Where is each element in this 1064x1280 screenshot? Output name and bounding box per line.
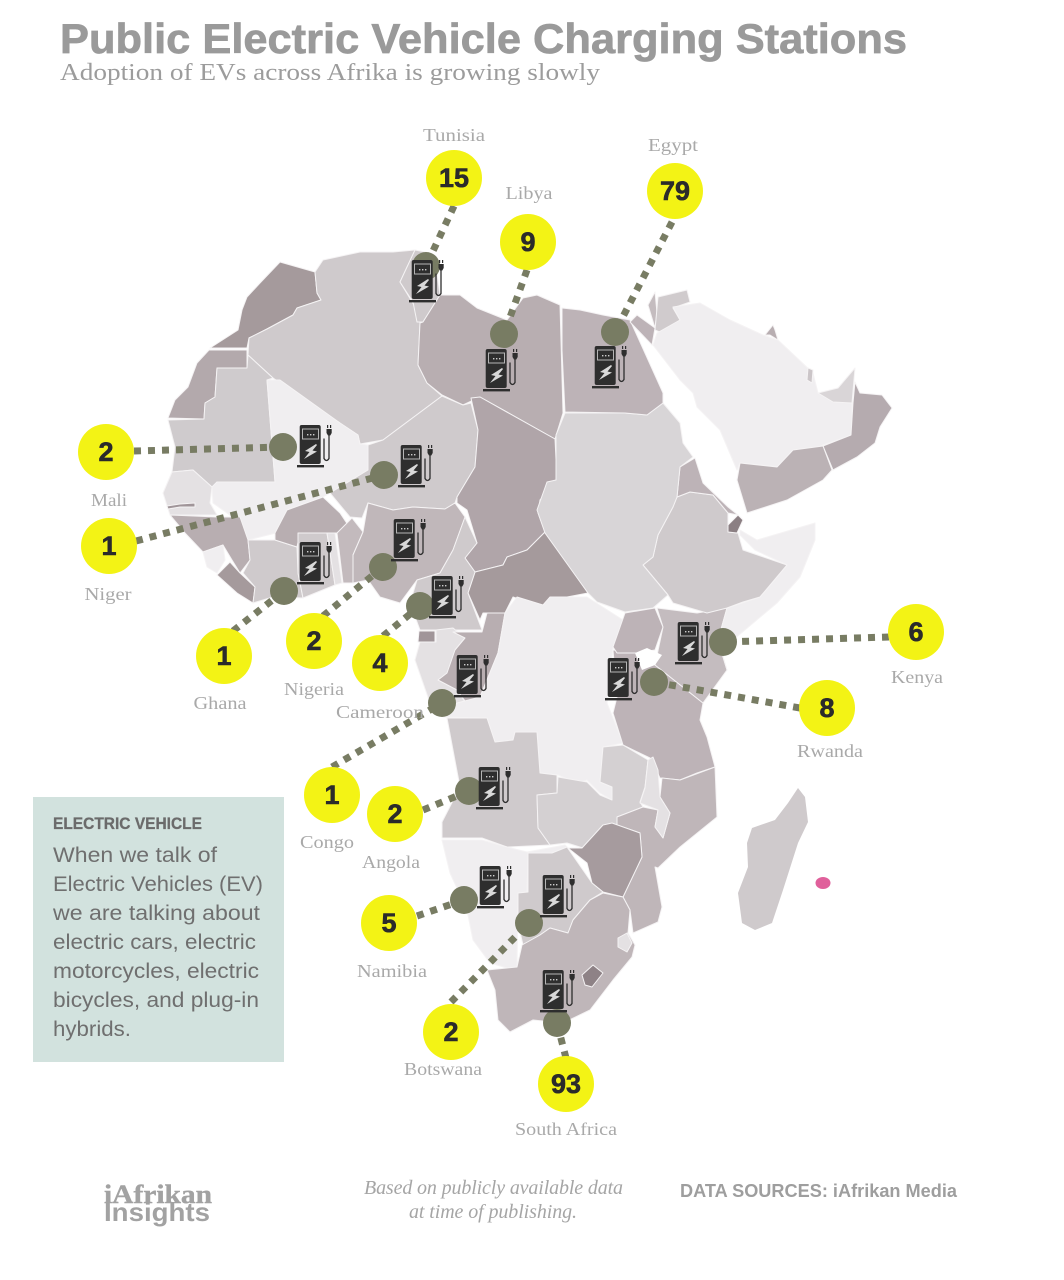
- marker: Cameroon 4: [336, 635, 424, 722]
- icon: pump Egypt: [592, 346, 627, 388]
- country: Ghana: [298, 533, 335, 598]
- icon: pump Libya: [483, 349, 518, 391]
- charging pump icons: [297, 260, 710, 1012]
- line: Ghana: [233, 591, 284, 631]
- marker: Nigeria 2: Nigeria: [284, 679, 344, 699]
- country: Reunion: [816, 877, 830, 889]
- line: Namibia: [417, 900, 464, 916]
- country: Kenya: [655, 608, 727, 703]
- title: Public Electric Vehicle Charging Stations: [60, 15, 907, 62]
- country: Ethiopia: [643, 492, 787, 613]
- icon: pump Botswana: [540, 875, 575, 917]
- data sources: DATA SOURCES: iAfrikan Media: [680, 1181, 958, 1201]
- marker: Angola 2: Angola: [362, 852, 420, 872]
- marker: Botswana 2: [404, 1004, 482, 1079]
- marker: Libya 9: 9: [520, 227, 536, 257]
- line: South Africa: [557, 1023, 566, 1058]
- country: Oman: [823, 382, 892, 470]
- line: Kenya: [723, 637, 889, 642]
- marker: Nigeria 2: 2: [306, 626, 322, 656]
- marker: Namibia 5: Namibia: [357, 961, 427, 981]
- marker: Rwanda 8: [797, 680, 863, 761]
- panel body text: bicycles, and plug-in: [53, 989, 259, 1012]
- line: Cameroon: [383, 606, 420, 636]
- connector lines: [134, 206, 889, 1058]
- marker: Namibia 5: [357, 895, 427, 981]
- country: Ivory Coast: [243, 540, 303, 603]
- marker: Niger 1: Niger: [84, 584, 132, 604]
- country: Gabon: [415, 628, 467, 705]
- panel body text: Electric Vehicles (EV): [53, 873, 263, 896]
- country: Sierra Leone: [203, 545, 225, 573]
- country: Kuwait: [765, 325, 778, 340]
- country: Cameroon: [410, 517, 482, 630]
- country: Burkina Faso: [275, 497, 348, 547]
- country: Somalia: [718, 523, 815, 670]
- footnote: at time of publishing.: [409, 1201, 577, 1223]
- marker: Tunisia 15: Tunisia: [423, 125, 485, 145]
- marker: Mali 2: [78, 424, 134, 510]
- logo: iAfrikan Insights: Insights: [104, 1197, 210, 1227]
- marker: Niger 1: [81, 518, 137, 604]
- marker: Rwanda 8: 8: [819, 693, 835, 723]
- marker: Cameroon 4: 4: [372, 648, 388, 678]
- country: Israel: [648, 292, 657, 328]
- marker: Nigeria 2: [284, 613, 344, 699]
- marker: South Africa 93: South Africa: [515, 1119, 617, 1139]
- marker: Angola 2: [362, 786, 423, 872]
- logo: iAfrikan Insights: iAfrikan: [104, 1180, 213, 1209]
- marker: Botswana 2: Botswana: [404, 1059, 482, 1079]
- country: Central African Republic: [468, 532, 588, 620]
- marker: Congo 1: 1: [324, 780, 340, 810]
- panel body text: electric cars, electric: [53, 931, 256, 954]
- country: Chad: [457, 397, 557, 572]
- country: Jordan: [655, 290, 690, 333]
- country: Lesotho: [582, 965, 603, 987]
- marker: Cameroon 4: Cameroon: [336, 702, 424, 722]
- country: Zambia: [537, 745, 648, 848]
- line: Niger: [136, 475, 384, 541]
- icon: pump Ghana: [297, 542, 332, 584]
- marker: Ghana 1: [194, 628, 252, 713]
- country: Namibia: [442, 840, 568, 968]
- marker: Egypt 79: 79: [660, 176, 690, 206]
- marker: Congo 1: [300, 767, 360, 852]
- panel body text: When we talk of: [53, 844, 217, 867]
- icon: pump Tunisia: [409, 260, 444, 302]
- marker: Tunisia 15: [423, 125, 485, 206]
- marker: Botswana 2: 2: [443, 1017, 459, 1047]
- country: Benin: [337, 518, 363, 583]
- line: Botswana: [451, 923, 529, 1002]
- country: Tunisia: [400, 250, 440, 322]
- country: Nigeria: [353, 503, 465, 603]
- icon: pump Niger: [398, 445, 433, 487]
- icon: pump South Africa: [540, 970, 575, 1012]
- country: UAE: [818, 368, 855, 403]
- country: Saudi Arabia: [653, 303, 852, 470]
- marker: Namibia 5: 5: [381, 908, 397, 938]
- country: Niger: [330, 396, 478, 518]
- line: Rwanda: [654, 682, 800, 708]
- country: Liberia: [217, 562, 255, 603]
- panel: electric vehicle definition: [33, 797, 284, 1062]
- icon: pump Congo: [454, 655, 489, 697]
- country: Tanzania: [613, 650, 715, 780]
- line: Tunisia: [426, 206, 454, 266]
- country: Zimbabwe: [568, 823, 642, 897]
- marker: Egypt 79: Egypt: [648, 135, 698, 155]
- icon: pump Mali: [297, 425, 332, 467]
- panel body text: hybrids.: [53, 1018, 131, 1041]
- marker: Kenya 6: Kenya: [891, 667, 943, 687]
- panel body text: we are talking about: [52, 902, 260, 925]
- country: Qatar: [807, 368, 813, 383]
- country: Algeria: [248, 250, 442, 444]
- marker: Ghana 1: 1: [216, 641, 232, 671]
- marker: Rwanda 8: Rwanda: [797, 741, 863, 761]
- marker: Kenya 6: 6: [908, 617, 924, 647]
- country: Djibouti: [728, 515, 743, 533]
- marker: Angola 2: 2: [387, 799, 403, 829]
- country: Western Sahara: [168, 350, 247, 419]
- country: Mali: [212, 380, 368, 540]
- country: Angola: [442, 718, 557, 847]
- marker: Kenya 6: [888, 604, 944, 687]
- marker: South Africa 93: [515, 1056, 617, 1139]
- marker: Ghana 1: Ghana: [194, 693, 247, 713]
- line: Libya: [504, 270, 527, 334]
- panel heading: ELECTRIC VEHICLE: [53, 814, 202, 833]
- feature: Lake Victoria: [635, 648, 662, 670]
- icon: pump Nigeria: [391, 519, 426, 561]
- country: Libya: [418, 295, 563, 439]
- line: Congo: [332, 703, 442, 767]
- country: Republic of Congo: [438, 613, 505, 705]
- country: Madagascar: [738, 788, 808, 930]
- country: Malawi: [640, 757, 670, 838]
- country: Gambia: [167, 503, 195, 509]
- icon: pump Rwanda: [605, 658, 640, 700]
- line: Egypt: [615, 222, 672, 332]
- marker: Mali 2: Mali: [91, 490, 127, 510]
- marker: South Africa 93: 93: [551, 1069, 581, 1099]
- country: Swaziland: [618, 933, 632, 952]
- marker: Libya 9: Libya: [506, 183, 552, 203]
- icon: pump Angola: [476, 767, 511, 809]
- logo: iAfrikan Insights: [104, 1180, 213, 1227]
- country: Senegal: [163, 470, 217, 515]
- panel body text: [52, 844, 263, 1041]
- country: Mauritania: [168, 355, 275, 487]
- country: Togo: [327, 533, 342, 585]
- line: Angola: [423, 791, 469, 810]
- map of Africa and Arabia: [163, 250, 892, 1032]
- country: South Africa: [487, 893, 635, 1032]
- country: Morocco: [210, 262, 321, 348]
- country: Guinea: [170, 515, 250, 573]
- marker: Libya 9: [500, 183, 556, 270]
- marker: Egypt 79: [647, 135, 703, 219]
- location dots: [269, 252, 737, 1037]
- panel body text: motorcycles, electric: [53, 960, 259, 983]
- subtitle: Adoption of EVs across Afrika is growing slowly: [60, 60, 600, 86]
- country: Botswana: [518, 847, 603, 945]
- country: Sinai: [630, 315, 655, 345]
- line: Mali: [134, 447, 283, 451]
- country: Mozambique: [617, 767, 717, 933]
- marker: Niger 1: 1: [101, 531, 117, 561]
- marker: Congo 1: Congo: [300, 832, 354, 852]
- footnote: Based on publicly available data: [364, 1177, 623, 1199]
- marker: Mali 2: 2: [98, 437, 114, 467]
- country: Equatorial Guinea: [418, 631, 435, 642]
- country: Sudan: [537, 403, 693, 612]
- country: Yemen: [737, 446, 832, 513]
- marker: Tunisia 15: 15: [439, 163, 469, 193]
- country: Eritrea: [677, 458, 738, 515]
- country: Uganda: [613, 608, 663, 653]
- line: Nigeria: [323, 567, 383, 616]
- icon: pump Cameroon: [429, 576, 464, 618]
- footnote: [364, 1177, 623, 1223]
- country: DR Congo: [443, 597, 623, 800]
- icon: pump Namibia: [477, 866, 512, 908]
- country: Egypt: [562, 308, 663, 415]
- icon: pump Kenya: [675, 622, 710, 664]
